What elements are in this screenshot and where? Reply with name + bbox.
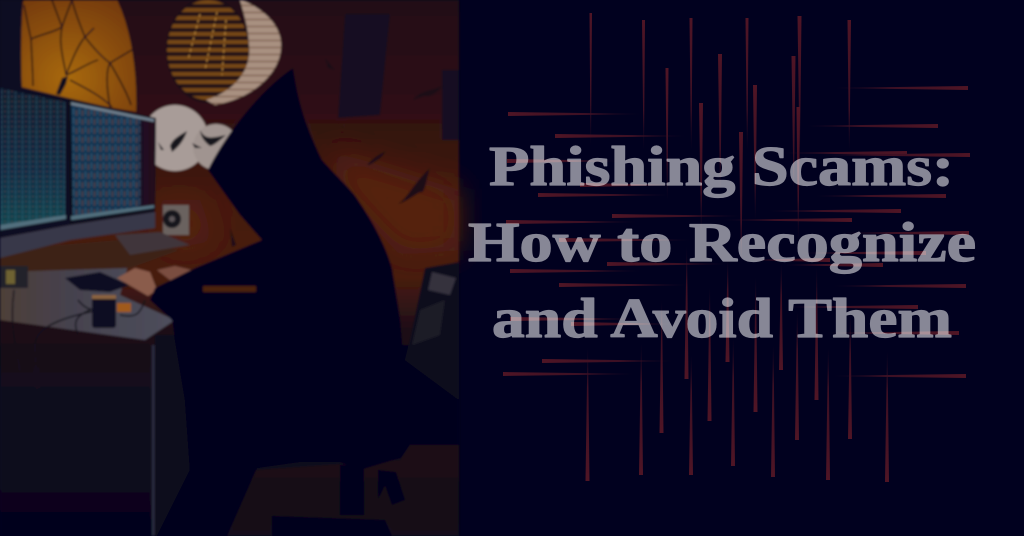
icon: white paper globes with bats — [142, 105, 239, 171]
icon: hand on keyboard — [117, 266, 200, 296]
icon: coffee cup — [92, 295, 131, 328]
icon: wall bats and poster — [230, 14, 459, 247]
horizontal red lines: right group — [723, 86, 970, 378]
icon: office chair — [272, 465, 405, 536]
title: and Avoid Them — [492, 288, 952, 350]
icon: speaker — [163, 205, 189, 235]
vertical red lines: lower group — [586, 247, 889, 482]
icon: spider web window — [21, 0, 137, 112]
title — [468, 136, 976, 350]
icon: desk — [0, 232, 190, 536]
vertical red lines: upper group — [590, 13, 851, 262]
icon: side rack — [405, 262, 459, 400]
title: How to Recognize — [468, 212, 976, 274]
title: Phishing Scams: — [489, 136, 954, 198]
horizontal red lines: left group — [503, 112, 740, 376]
icon: paper lantern — [166, 0, 281, 105]
icon: monitors — [0, 82, 156, 258]
photo: hooded hacker at desk — [0, 0, 459, 536]
icon: hooded figure silhouette — [150, 68, 410, 536]
